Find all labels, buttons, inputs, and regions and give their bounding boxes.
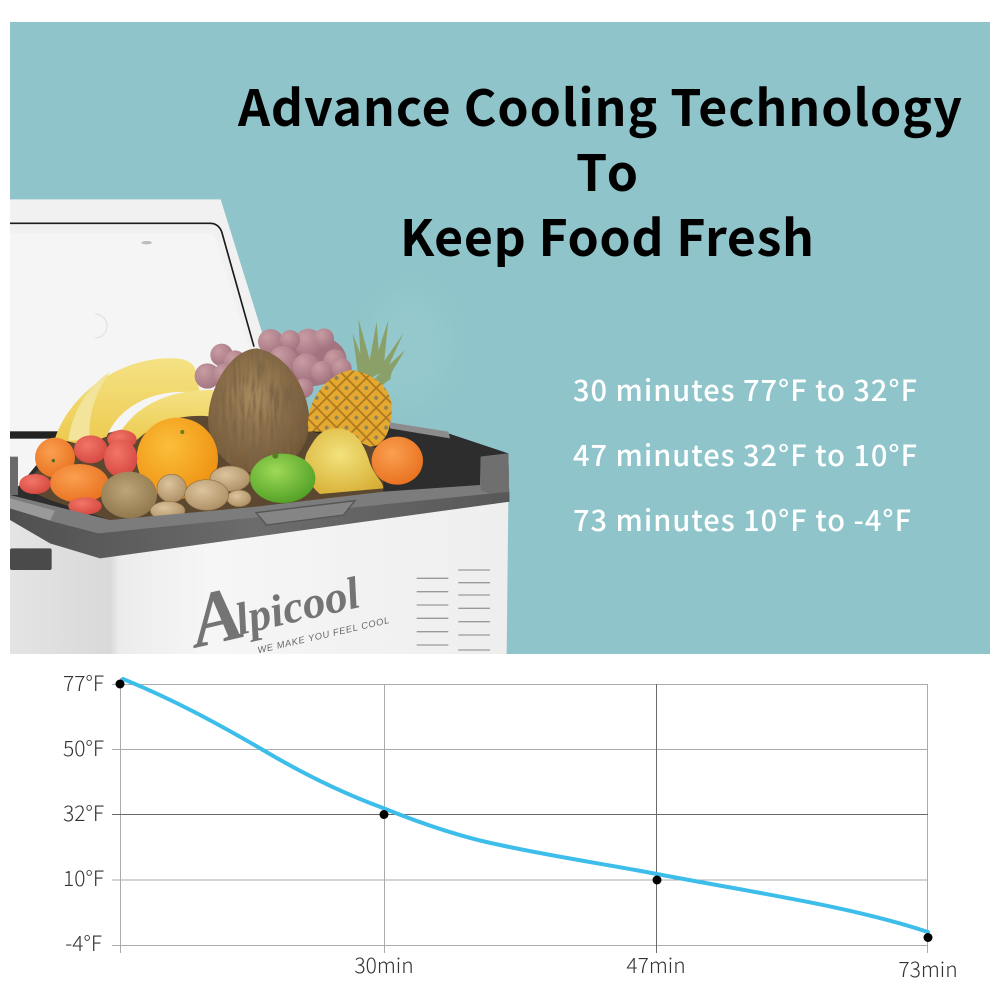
coconut — [208, 348, 309, 473]
vents — [417, 570, 490, 650]
fruit pile — [19, 318, 423, 520]
y axis labels — [63, 668, 104, 958]
large orange — [137, 418, 218, 499]
grid lines — [112, 678, 928, 953]
y axis labels: -4°F — [65, 928, 102, 958]
x axis labels: 73min — [898, 954, 958, 984]
title: Advance Cooling Technology — [237, 69, 962, 141]
bananas — [55, 358, 213, 445]
blue cooling curve — [123, 679, 928, 932]
lime — [250, 453, 315, 503]
fridge body — [10, 500, 508, 654]
pineapple — [308, 318, 405, 447]
x axis labels: 30min — [354, 950, 414, 980]
fridge rim — [10, 453, 509, 558]
logo: Alpicool — [193, 576, 389, 653]
title — [237, 69, 962, 271]
cooling time stats: 47 minutes 32°F to 10°F — [573, 433, 917, 475]
walnuts — [150, 466, 251, 520]
logo: Alpicool: lpicool — [230, 567, 365, 645]
fridge inner cavity and right corner — [10, 422, 510, 520]
y axis labels: 10°F — [63, 863, 104, 893]
pile shadow base — [34, 416, 384, 520]
line chart: cooling curve — [63, 668, 958, 984]
x axis labels — [354, 950, 958, 984]
y axis labels: 77°F — [63, 668, 104, 698]
cooling time stats: 30 minutes 77°F to 32°F — [573, 368, 917, 410]
y axis labels: 50°F — [63, 733, 104, 763]
cooling time stats: 73 minutes 10°F to -4°F — [573, 498, 911, 540]
strawberries — [19, 430, 137, 515]
panel: teal hero background — [10, 22, 990, 654]
data points — [116, 680, 932, 942]
cooling time stats — [573, 368, 917, 540]
soft glow behind fruit — [370, 290, 450, 403]
right tangerine — [372, 437, 423, 485]
title: Keep Food Fresh — [400, 199, 814, 271]
illustration: portable fridge filled with fruit — [10, 199, 509, 665]
logo: Alpicool: WE MAKE YOU FEEL COOL — [257, 615, 391, 655]
pear — [305, 428, 383, 494]
y axis labels: 32°F — [63, 798, 104, 828]
fridge lid — [10, 199, 267, 490]
logo: Alpicool: A — [178, 570, 251, 665]
title: To — [576, 134, 638, 206]
tangerines — [35, 438, 109, 503]
grapes — [195, 328, 352, 398]
x axis labels: 47min — [626, 950, 686, 980]
kiwi — [101, 472, 157, 518]
